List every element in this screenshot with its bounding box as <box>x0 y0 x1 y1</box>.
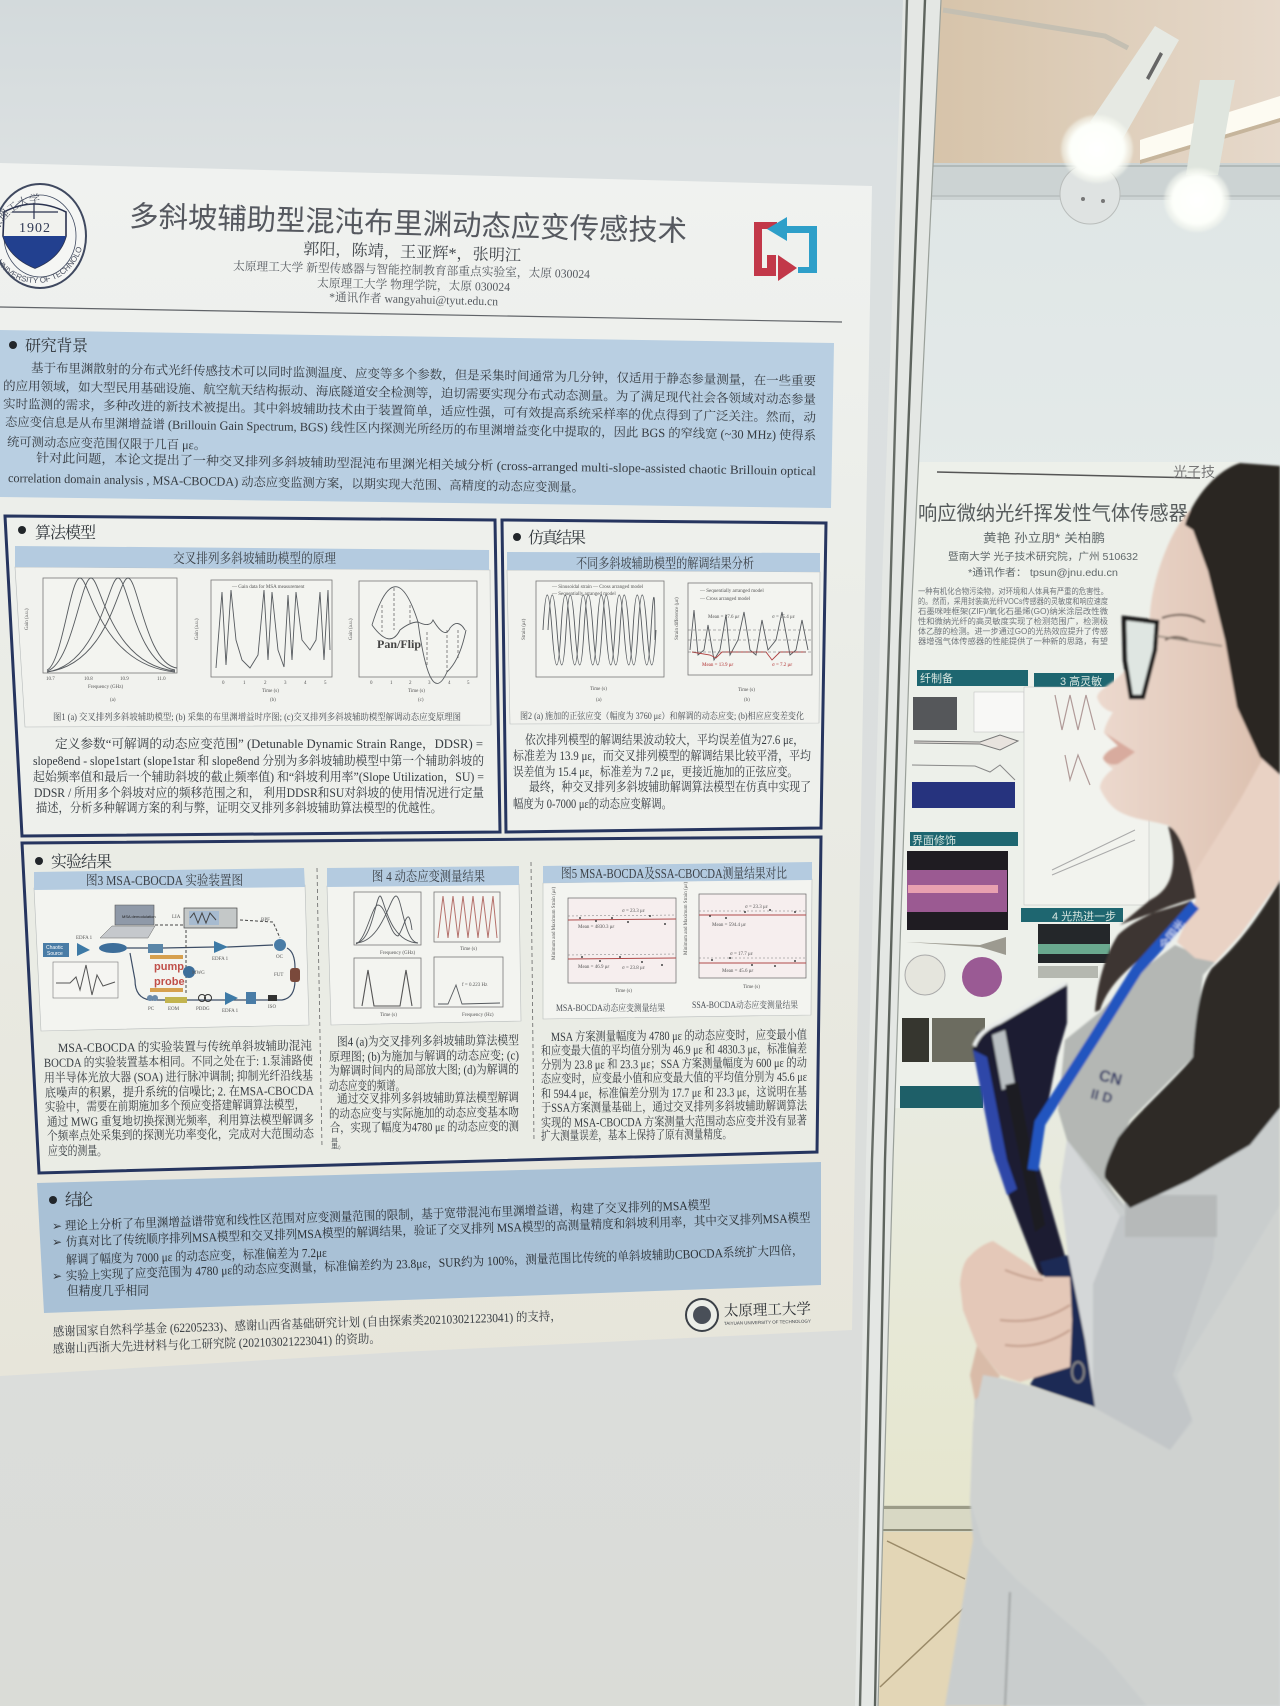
heading: algorithm model <box>18 523 96 542</box>
figure 5 title: 图5 MSA-BOCDA及SSA-CBOCDA测量结果对比 <box>561 865 787 881</box>
chaotic source: Chaotic <box>46 945 63 951</box>
chart: strain difference: Mean = 13.9 με <box>702 663 733 668</box>
chart: strain difference: (b) <box>744 698 750 703</box>
corresponding author: *通讯作者 wangyahui@tyut.edu.cn <box>329 289 498 308</box>
chart: strain difference: Time (s) <box>738 688 755 693</box>
affiliation 2: 太原理工大学 物理学院，太原 030024 <box>317 275 510 294</box>
neighbour poster section 2 <box>900 832 1018 1108</box>
chart: gain time series: Time (s) <box>262 689 279 694</box>
chart 4c <box>354 958 421 1018</box>
chart: pan and flip: 4 <box>448 681 451 686</box>
figure 4 band <box>327 866 519 887</box>
algorithm paragraph: 定义参数“可解调的动态应变范围” (Detunable Dynamic Strain Range，DDSR) = <box>55 736 483 751</box>
header rule <box>0 307 842 322</box>
neighbour poster abstract <box>918 586 1108 646</box>
background paragraphs: correlation domain analysis , MSA-CBOCDA) 动态应变监测方案，以期实现大范围、高精度的动态应变测量。 <box>8 470 584 495</box>
chart: demodulated strain: Strain (με) <box>522 618 527 640</box>
neighbour poster abstract: 性和微纳光纤的高灵敏度实现了检测范围广，检测极 <box>918 616 1108 626</box>
laptop: MSA demodulation <box>122 914 156 919</box>
wall trim <box>925 163 1280 200</box>
conclusion bullets: ➢ <box>52 1235 62 1249</box>
pen lower <box>1005 1082 1045 1232</box>
algorithm paragraph: 描述，分析多种解调方案的利与弊，证明交叉排列多斜坡辅助算法模型的优越性。 <box>36 800 442 815</box>
chart 4a: Frequency (GHz) <box>380 951 415 956</box>
conclusion bullets: 仿真对比了传统顺序排列MSA模型和交叉排列MSA模型的解调结果，验证了交叉排列 MSA模型的高测量精度和斜坡利用率，其中交叉排列MSA模型 <box>66 1210 811 1249</box>
ceiling rail <box>943 10 1128 48</box>
neighbour poster section 1 <box>912 670 1028 808</box>
experiment text column 1: MSA-CBOCDA 的实验装置与传统单斜坡辅助混沌 <box>58 1038 312 1055</box>
chart 5a: Minimum and Maximum Strain (με) <box>552 887 557 960</box>
chart: gain time series: 0 <box>222 681 225 686</box>
diagram: optical path <box>43 905 300 1014</box>
book cover <box>973 983 1067 1277</box>
algorithm paragraph: DDSR / 所用多个斜坡对应的频移范围之和， 利用DDSR和SU对斜坡的使用情况进行定量 <box>34 785 484 800</box>
face <box>1097 510 1262 880</box>
components <box>99 939 300 1004</box>
chart: pan and flip: Time (s) <box>408 689 425 694</box>
experiment text column 2 <box>329 1032 519 1151</box>
experiment text column 1: 底噪声的积累，提升系统的信噪比; 2. 在MSA-CBOCDA <box>45 1083 314 1100</box>
logo roof lines <box>12 203 58 219</box>
inset waveform <box>53 962 118 998</box>
neighbour poster abstract: 一种有机化合物污染物，对环境和人体具有严重的危害性。 <box>918 586 1108 596</box>
chart: pan and flip <box>349 581 477 703</box>
pump and probe labels: pump <box>154 961 184 973</box>
simulation paragraph: 误差值为 15.4 με，标准差为 7.2 με，更接近施加的正弦应变。 <box>513 764 798 779</box>
chart: gain time series: (b) <box>270 698 276 703</box>
simulation paragraph: 最终，种交叉排列多斜坡辅助解调算法模型在仿真中实现了 <box>529 779 811 794</box>
book page edge <box>974 983 1066 1046</box>
chart 5b: Minimum and Maximum Strain (με) <box>684 882 689 955</box>
conclusion bullets: ➢ <box>52 1269 62 1283</box>
conclusion bullets <box>52 1197 811 1298</box>
chart 4b <box>434 892 500 952</box>
chart 4c: Time (s) <box>380 1013 397 1018</box>
chart: pan and flip: 5 <box>467 681 470 686</box>
chart: gain spectra: 10.9 <box>120 677 129 682</box>
hand <box>960 1241 1072 1382</box>
chaotic source: Source <box>47 951 63 957</box>
neighbour poster affiliation: 暨南大学 光子技术研究院，广州 510632 <box>948 550 1138 563</box>
chart: gain time series <box>195 580 332 703</box>
conclusion bullets: 实验上实现了应变范围为 4780 με的动态应变测量，标准偏差约为 23.8με，SUR约为 100%，测量范围比传统的单斜坡辅助CBOCDA系统扩大四倍， <box>66 1242 804 1283</box>
lanyard <box>1033 905 1195 1170</box>
heading: simulation results: 仿真结果 <box>528 528 586 547</box>
conclusion bullets: 解调了幅度为 7000 με 的动态应变，标准偏差为 7.2με <box>66 1245 327 1267</box>
chart: pan and flip: (c) <box>418 698 424 703</box>
simulation paragraph <box>513 732 811 811</box>
finger shadows <box>1000 1270 1070 1346</box>
chart: pan and flip: 1 <box>390 681 393 686</box>
chart 5a <box>552 887 676 994</box>
sleeve fold <box>1005 1592 1010 1706</box>
tube light <box>1140 96 1280 164</box>
neck <box>1170 750 1280 962</box>
footer university logo: 太原理工大学 <box>724 1301 811 1320</box>
shirt print: CN <box>1097 1067 1124 1089</box>
simulation paragraph: 标准差为 13.9 με，而交叉排列模型的解调结果比较平滑，平均 <box>513 748 811 763</box>
chart: gain spectra: Frequency (GHz) <box>88 685 123 690</box>
chart 4d: f = 0.223 Hz <box>462 983 488 988</box>
neighbour poster abstract: 的。然而，采用封装高光纤VOCs传感器的灵敏度和响应速度 <box>918 596 1108 606</box>
experiment text column 1: 应变的测量。 <box>48 1143 107 1158</box>
chart 5b: Time (s) <box>743 985 760 990</box>
experiment text column 3: MSA 方案测量幅度为 4780 με 的动态应变时，应变最小值 <box>551 1027 807 1044</box>
chaotic source <box>43 943 69 957</box>
chart 4d: Frequency (Hz) <box>462 1013 494 1018</box>
background paragraphs: 态应变信息是从布里渊增益谱 (Brillouin Gain Spectrum, BGS) 线性区内探测光所经历的布里渊增益变化中提取的，因此 BGS 的窄线宽 (~30 MHz) 使得系 <box>5 414 817 443</box>
shirt pocket <box>1125 1195 1217 1237</box>
chart: strain difference: σ = 7.2 με <box>772 663 792 668</box>
simulation paragraph: 幅度为 0-7000 με的动态应变解调。 <box>513 796 672 811</box>
neighbour poster section 3: 3 高灵敏 <box>1060 674 1102 688</box>
component labels: LIA <box>172 915 181 920</box>
figure caption: 图1 (a) 交叉排列多斜坡辅助模型; (b) 采集的布里渊增益时序图; (c)交叉排列多斜坡辅助模型解调动态应变原理图 <box>53 711 461 722</box>
chart: gain time series: Gain (a.u.) <box>195 618 200 640</box>
heading: experimental results: 实验结果 <box>51 853 112 871</box>
experiment text column 1 <box>44 1038 314 1158</box>
figure 4 title: 图 4 动态应变测量结果 <box>372 868 485 884</box>
background paragraphs: 针对此问题，本论文提出了一种交叉排列多斜坡辅助型混沌布里渊光相关域分析 (cross-arranged multi-slope-assisted chaotic Brillouin optical <box>36 450 817 478</box>
component labels: BPF <box>261 918 270 923</box>
subheader title: 不同多斜坡辅助模型的解调结果分析 <box>576 555 754 571</box>
experiment text column 1: 通过 MWG 重复地切换探测光频率，利用算法模型解调多 <box>47 1112 314 1129</box>
wrist <box>970 1346 1000 1400</box>
acknowledgement: 感谢山西浙大先进材料与化工研究院 (202103021223041) 的资助。 <box>53 1331 381 1356</box>
background paragraphs <box>3 360 817 495</box>
pump and probe labels <box>150 955 185 992</box>
figure 4 strain measurement <box>327 866 521 1025</box>
subheader band <box>15 546 489 570</box>
logo shield blue <box>3 236 66 268</box>
experiment text column 1: 个频率点处采集到的探测光功率变化，完成对大范围动态 <box>47 1126 314 1143</box>
chart 5b: Mean = 594.4 με <box>712 923 746 928</box>
chart: gain time series: 5 <box>324 681 327 686</box>
hair top <box>1185 463 1280 775</box>
experiment text column 1: 实验中，需要在前期施加多个预应变搭建解调算法模型， <box>45 1097 305 1114</box>
background paragraphs: 的应用领域，如大型民用基础设施、航空航天结构振动、海底隧道安全检测等，迫切需要实现分布式动态测量。为了满足现代社会各领域对动态参量 <box>3 378 816 407</box>
amplifiers <box>77 941 238 1005</box>
jacket lapel <box>1060 1140 1120 1407</box>
lanyard text: 全国光 <box>1156 917 1188 952</box>
poster sheet <box>0 163 872 1376</box>
experiment text column 2: 原理图; (b)为施加与解调的动态应变; (c) <box>329 1047 519 1064</box>
experiment text column 3: 态应变时，应变最小值和应变最大值的平均值分别为 45.6 με <box>541 1069 807 1086</box>
person <box>945 463 1280 1706</box>
shirt print <box>1089 1067 1124 1106</box>
chart 5b: Mean = 45.6 με <box>722 969 753 974</box>
chart captions: MSA-BOCDA动态应变测量结果 <box>556 1002 665 1013</box>
experiment text column 1: BOCDA 的实验装置基本相同。不同之处在于: 1.泵浦路使 <box>44 1053 313 1070</box>
algorithm paragraph: 起始频率值和最后一个辅助斜坡的截止频率值) 和“斜坡利用率”(Slope Utilization，SU) = <box>33 769 484 784</box>
skirting board <box>880 1505 990 1532</box>
component labels: PDDG <box>196 1007 210 1012</box>
jacket back and lower body <box>945 1090 1280 1706</box>
chart: demodulated strain <box>522 581 664 703</box>
experiment text column 3: 扩大测量误差，基本上保持了原有测量精度。 <box>541 1126 732 1143</box>
chart 5a: Mean = 46.9 με <box>578 965 609 970</box>
figure 3 title: 图3 MSA-CBOCDA 实验装置图 <box>86 872 243 888</box>
component labels: ISO <box>268 1005 276 1010</box>
footer university logo: TAIYUAN UNIVERSITY OF TECHNOLOGY <box>724 1319 811 1326</box>
chart: demodulated strain: — Sequentially arranged model <box>551 592 616 597</box>
conclusion bullets: 但精度几乎相同 <box>67 1283 149 1298</box>
chart: gain spectra: 10.8 <box>84 677 93 682</box>
lips <box>1103 733 1135 765</box>
chart: strain difference: Mean = 27.6 με <box>708 615 739 620</box>
figure 3 setup <box>34 868 309 1031</box>
conclusion bullets: 理论上分析了布里渊增益谱带宽和线性区范围对应变测量范围的限制，基于宽带混沌布里渊增益谱，构建了交叉排列的MSA模型 <box>65 1197 711 1233</box>
neighbouring poster <box>895 462 1240 1108</box>
title: 多斜坡辅助型混沌布里渊动态应变传感技术 <box>129 200 687 248</box>
experiment text column 2: 合，实现了幅度为4780 με 的动态应变的测 <box>330 1118 519 1135</box>
acknowledgement <box>53 1308 562 1356</box>
dark book and strap behind hand <box>1030 1255 1095 1407</box>
panel: experimental results <box>22 837 821 1173</box>
laptop <box>100 905 156 938</box>
figure area <box>15 567 491 727</box>
poster content <box>0 183 842 1356</box>
component labels: PC <box>148 1007 155 1012</box>
figure 5 comparison: SSA-BOCDA动态应变测量结果 <box>692 999 798 1010</box>
chart 4d <box>434 957 503 1018</box>
conclusion bullets: ➢ <box>52 1219 62 1233</box>
shirt print: II D <box>1089 1085 1114 1106</box>
chart 5b: σ = 23.3 με <box>745 905 768 910</box>
chart: strain difference: — Sequentially arranged model <box>699 589 764 594</box>
background paragraphs: 实时监测的需求，多种改进的新技术被提出。其中斜坡辅助技术由于装置简单，适应性强，可有效提高系统采样率的优点得到了广泛关注。然而，动 <box>3 396 817 425</box>
spot light one <box>1061 26 1179 183</box>
chart 4b: Time (s) <box>460 947 477 952</box>
big sleeve <box>970 1205 1280 1706</box>
chart 5a: Time (s) <box>615 989 632 994</box>
grey T-shirt <box>1058 945 1215 1210</box>
chart: strain difference: σ = 15.4 με <box>772 615 795 620</box>
experiment text column 1: 用半导体光放大器 (SOA) 进行脉冲调制; 抑制光纤沿线基 <box>44 1068 313 1085</box>
chart: gain time series: 4 <box>304 681 307 686</box>
chart: demodulated strain: (a) <box>596 698 602 703</box>
experiment text column 3: 于SSA方案测量基础上，通过交叉排列多斜坡辅助解调算法 <box>541 1098 807 1115</box>
neighbour poster section 3 <box>1024 673 1149 905</box>
heading: conclusion: 结论 <box>65 1191 93 1209</box>
logo shield outline <box>3 204 66 268</box>
experiment text column 3: 实现的 MSA-CBOCDA 方案测量大范围动态应变并没有显著 <box>541 1113 807 1130</box>
experiment text column 3: 分别为 23.8 με 和 23.3 με；SSA 方案测量幅度为 600 με 的动 <box>541 1055 807 1072</box>
figure caption: 图2 (a) 施加的正弦应变（幅度为 3760 με）和解调的动态应变; (b)相应应变差变化 <box>520 710 804 721</box>
neighbour poster header rule <box>937 472 1200 478</box>
experiment text column 3 <box>541 1027 807 1143</box>
chart 4a <box>354 892 421 956</box>
right exhibition wall <box>875 160 1280 1510</box>
chart 5a: σ = 23.3 με <box>622 909 645 914</box>
footer university logo <box>686 1299 811 1331</box>
experiment text column 3: 和 594.4 με，标准偏差分别为 17.7 με 和 23.3 με，这说明在基 <box>541 1084 807 1101</box>
chart: gain time series: 2 <box>264 681 267 686</box>
chart: gain spectra: Gain (a.u.) <box>25 608 30 630</box>
chart 5a: Mean = 4830.3 με <box>578 925 614 930</box>
panel: simulation results <box>502 520 826 832</box>
figure 5 comparison <box>543 862 812 1019</box>
subheader band <box>507 552 820 572</box>
neighbour poster section 4: 4 光热进一步 <box>1052 909 1116 923</box>
chart: gain time series: — Gain data for MSA measurement <box>231 585 305 590</box>
experiment text column 2: 为解调时间内的局部放大图; (d)为解调的 <box>329 1061 519 1078</box>
component labels: OC <box>276 955 284 960</box>
chart 5b: σ = 17.7 με <box>730 952 753 957</box>
chart: strain difference <box>675 583 812 703</box>
algorithm paragraph <box>33 736 484 815</box>
chart: gain spectra: 10.7 <box>46 677 55 682</box>
neighbour poster abstract: 体乙醇的检测。进一步通过GO的光热效应提升了传感 <box>918 626 1108 636</box>
figure area <box>507 570 820 724</box>
subheader title: 交叉排列多斜坡辅助模型的原理 <box>173 550 336 566</box>
book spine <box>973 1050 1017 1195</box>
simulation paragraph: 依次排列模型的解调结果波动较大，平均误差值为27.6 με， <box>525 732 804 747</box>
component labels: EOM <box>168 1007 180 1012</box>
chart 5b <box>684 882 806 990</box>
heading: research background: 研究背景 <box>25 337 88 355</box>
panel: research background <box>0 330 834 508</box>
zipper pull <box>1072 1362 1084 1382</box>
exhibition frame pillar <box>855 0 941 1706</box>
neighbour poster authors: 黄艳 孙立朋* 关柏鹏 <box>983 530 1105 545</box>
neighbour poster abstract: 器增强气体传感器的性能提供了一种新的思路，有望 <box>918 636 1108 646</box>
chart: pan and flip: 2 <box>409 681 412 686</box>
component labels: MWG <box>192 971 205 976</box>
hair left lock <box>1095 826 1196 1012</box>
component labels: EDFA 1 <box>76 936 93 941</box>
ceiling <box>925 0 1280 165</box>
inner shirt lower panel <box>1093 1212 1217 1450</box>
chart: gain spectra <box>25 578 177 703</box>
panel: conclusion <box>37 1162 821 1313</box>
experiment text column 2: 通过交叉排列多斜坡辅助算法模型解调 <box>337 1089 519 1106</box>
chart: gain spectra: 11.0 <box>157 677 166 682</box>
heading: conclusion <box>49 1191 93 1209</box>
experiment text column 2: 量。 <box>331 1137 345 1151</box>
chart: gain time series: 3 <box>284 681 287 686</box>
neighbour poster institute: 光子技 <box>1173 464 1215 480</box>
figure 3 band <box>34 868 305 890</box>
panel: algorithm model <box>5 516 500 836</box>
chart: pan and flip: Pan/Flip <box>377 637 421 651</box>
authors: 郭阳，陈靖，王亚辉*，张明江 <box>303 239 521 265</box>
experiment text column 2: 图4 (a)为交叉排列多斜坡辅助算法模型 <box>337 1032 519 1049</box>
component labels <box>76 915 284 1014</box>
chart 5a: σ = 23.8 με <box>622 966 645 971</box>
neighbour poster section 4 <box>1021 908 1123 978</box>
component labels: EDFA 1 <box>222 1009 239 1014</box>
chart: demodulated strain: — Sinusoidal strain — Cross arranged model <box>551 585 644 590</box>
floor tiles <box>870 1532 1010 1706</box>
background paragraphs: 统可测动态应变范围仅限于几百 με。 <box>7 434 206 452</box>
chart: gain spectra: (a) <box>110 698 116 703</box>
chart: pan and flip: 0 <box>370 681 373 686</box>
heading: algorithm model: 算法模型 <box>35 523 96 542</box>
chart: pan and flip: Gain (a.u.) <box>349 618 354 640</box>
glasses <box>1124 618 1222 697</box>
background paragraphs: 基于布里渊散射的分布式光纤传感技术可以同时监测温度、应变等多个参数，但是采集时间通常为几分钟，仅适用于静态参量测量，在一些重要 <box>31 360 817 388</box>
column dividers <box>317 862 534 1147</box>
pump and probe labels: probe <box>154 976 185 988</box>
spot light two <box>1164 80 1235 232</box>
experiment text column 2: 的动态应变与实际施加的动态应变基本吻 <box>329 1104 519 1121</box>
algorithm paragraph: slope8end - slope1start (slope1star 和 slope8end 分别为多斜坡辅助模型中第一个辅助斜坡的 <box>33 753 484 768</box>
figure 5 band <box>543 862 812 883</box>
ceiling smoke detector <box>1060 164 1120 224</box>
chart: gain time series: 1 <box>243 681 246 686</box>
neighbour poster section 1: 纤制备 <box>920 671 953 685</box>
chart: strain difference: Strain difference (με) <box>675 597 680 640</box>
neighbour poster section 2: 界面修饰 <box>912 833 956 847</box>
experiment text column 2: 动态应变的频谱。 <box>329 1078 405 1093</box>
hair long right <box>1105 880 1280 1208</box>
acknowledgement: 感谢国家自然科学基金 (62205233)、感谢山西省基础研究计划 (自由探索类202103021223041) 的支持， <box>53 1308 562 1339</box>
institute logo <box>754 217 817 281</box>
pen <box>992 1030 1015 1090</box>
oscilloscope <box>184 908 237 928</box>
neighbour poster corresponding author: *通讯作者： tpsun@jnu.edu.cn <box>968 567 1118 579</box>
left wall background <box>0 0 945 1706</box>
neighbour poster title: 响应微纳光纤挥发性气体传感器 <box>918 502 1188 525</box>
university logo <box>0 183 87 289</box>
chart: demodulated strain: Time (s) <box>590 687 607 692</box>
chart: strain difference: — Cross arranged model <box>699 597 751 602</box>
logo year: 1902 <box>19 221 50 236</box>
component labels: FUT <box>274 973 283 978</box>
experiment text column 3: 和应变最大值的平均值分别为 46.9 με 和 4830.3 με，标准偏差 <box>541 1041 807 1058</box>
neighbour poster abstract: 石墨咪唑框架(ZIF)/氧化石墨烯(GO)纳米涂层改性微 <box>918 606 1108 616</box>
component labels: EDFA 1 <box>212 957 229 962</box>
eyebrow and eye <box>1162 615 1205 640</box>
affiliation 1: 太原理工大学 新型传感器与智能控制教育部重点实验室，太原 030024 <box>233 258 590 281</box>
chart: pan and flip: 3 <box>428 681 431 686</box>
